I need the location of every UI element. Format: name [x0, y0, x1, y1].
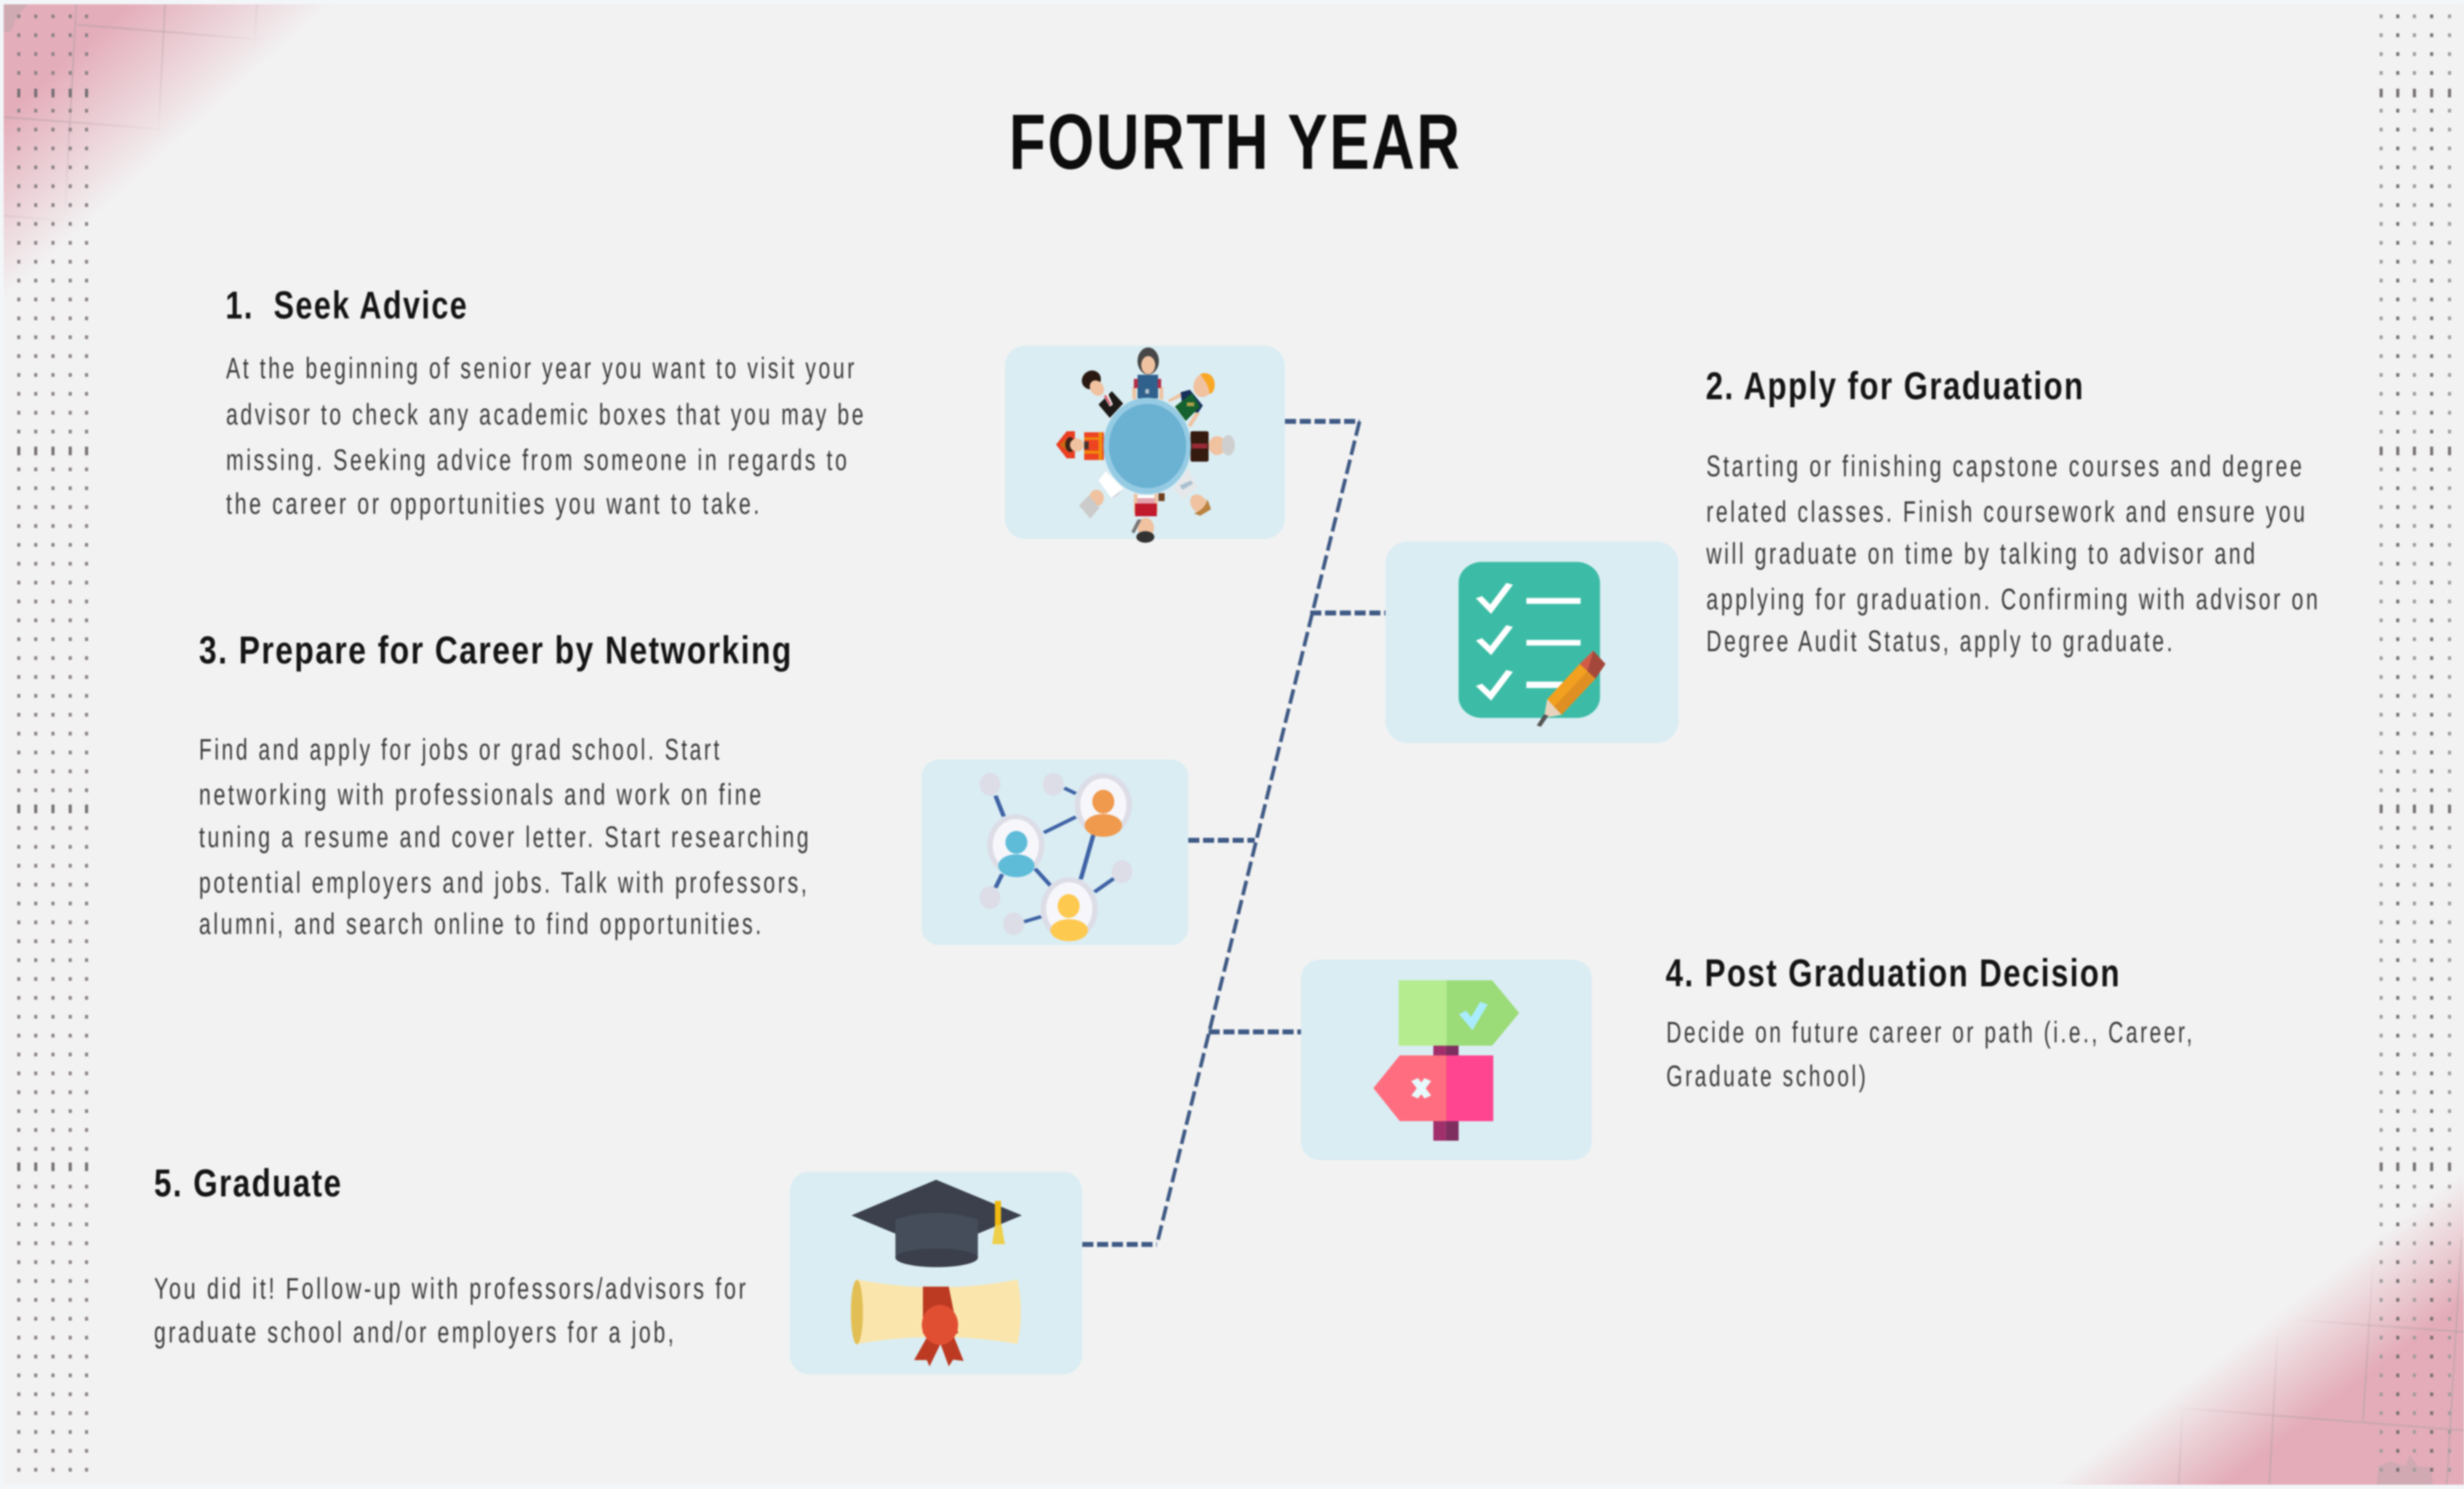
text block: step 3: tuning a resume and cover letter. Start researching [199, 821, 811, 854]
text block: step 4: Graduate school) [1666, 1060, 1868, 1093]
panel: step 4 post graduation decision [1301, 952, 2195, 1160]
image card: network [922, 760, 1188, 945]
text block: step 1: the career or opportunities you want to take. [226, 488, 762, 521]
image card: graduation [790, 1172, 1082, 1374]
icon: people around a table [1056, 347, 1235, 543]
text block: step 3: networking with professionals and work on fine [199, 779, 764, 811]
text block: step 2: will graduate on time by talking to advisor and [1706, 538, 2258, 570]
table [1103, 398, 1191, 494]
heading: step 3: 3. Prepare for Career by Networking [199, 629, 793, 672]
dashed connector timeline [1082, 421, 1385, 1244]
icon: graduation cap and diploma [851, 1180, 1022, 1366]
text block: step 3 [199, 734, 811, 941]
title: FOURTH YEAR [1009, 98, 1462, 185]
text block: step 2: Degree Audit Status, apply to graduate. [1706, 625, 2175, 658]
text block: step 5: You did it! Follow-up with professors/advisors for [154, 1273, 748, 1305]
heading: step 2: 2. Apply for Graduation [1706, 365, 2085, 408]
panel: step 3 prepare for career by networking [199, 629, 1188, 945]
panel: step 1 seek advice [225, 284, 1285, 543]
heading: step 1: 1. Seek Advice [225, 284, 468, 327]
text block: step 4 [1666, 1016, 2195, 1093]
text block: step 1: missing. Seeking advice from someone in regards to [226, 444, 849, 477]
text block: step 1: At the beginning of senior year you want to visit your [226, 352, 857, 385]
text block: step 4: Decide on future career or path (i.e., Career, [1666, 1016, 2195, 1049]
image card: checklist [1385, 542, 1679, 743]
text block: step 5 [154, 1273, 748, 1349]
text block: step 3: potential employers and jobs. Talk with professors, [199, 867, 809, 899]
image card: people around a table [1005, 346, 1285, 539]
icon: professional network [979, 773, 1132, 941]
heading: step 4: 4. Post Graduation Decision [1666, 952, 2121, 995]
panel: step 2 apply for graduation [1385, 365, 2320, 743]
text block: step 1 [226, 352, 866, 521]
icon: checklist with pencil [1459, 562, 1605, 727]
panel: step 5 graduate [154, 1162, 1082, 1374]
text block: step 3: Find and apply for jobs or grad school. Start [199, 734, 722, 766]
text block: step 3: alumni, and search online to find opportunities. [199, 908, 764, 941]
text block: step 1: advisor to check any academic boxes that you may be [226, 399, 866, 431]
text block: step 5: graduate school and/or employers for a job, [154, 1317, 676, 1349]
heading: step 5: 5. Graduate [154, 1162, 342, 1205]
icon: signpost [1374, 980, 1519, 1141]
image card: signpost [1301, 960, 1592, 1160]
text block: step 2 [1706, 450, 2320, 658]
